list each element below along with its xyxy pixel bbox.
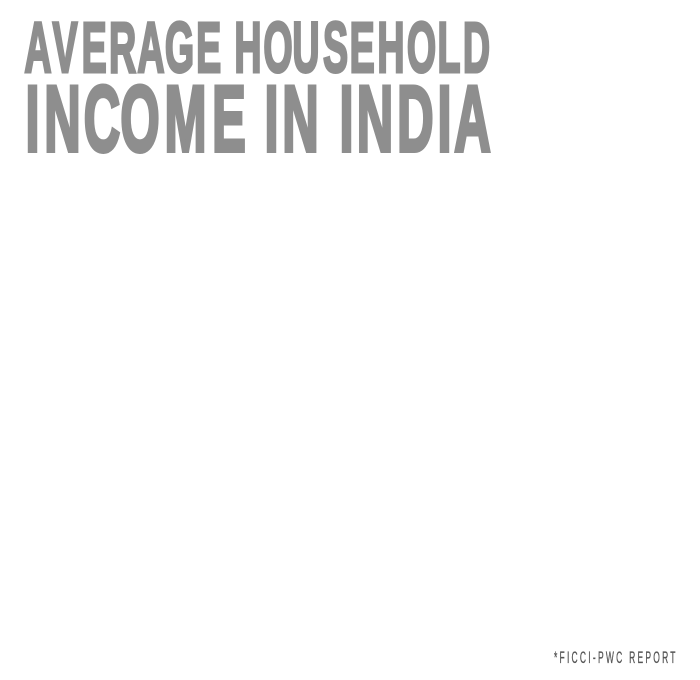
source note: *FICCI-PWC REPORT: [554, 648, 676, 667]
title: [24, 9, 491, 171]
title line 1: AVERAGE HOUSEHOLD: [24, 9, 490, 88]
title line 2: INCOME IN INDIA: [25, 66, 491, 171]
